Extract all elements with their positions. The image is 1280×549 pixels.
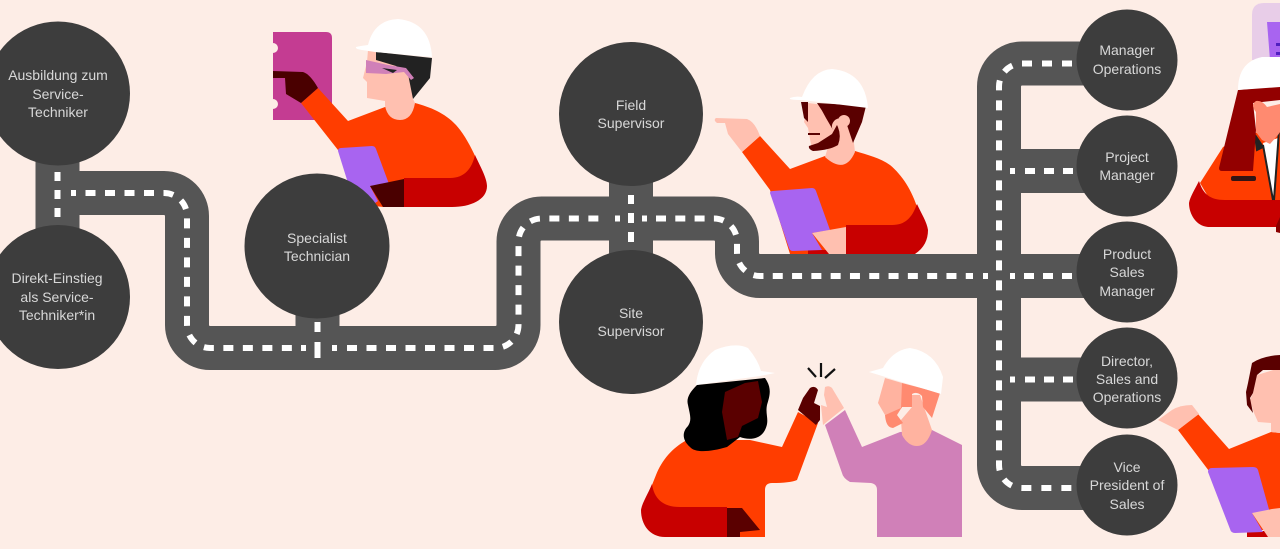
lower hand xyxy=(1252,508,1280,537)
raised dark hand xyxy=(798,387,820,425)
node: Specialist Technician xyxy=(244,174,390,318)
figure: technician pointing at tablet xyxy=(273,19,487,215)
eye xyxy=(382,68,397,73)
icon: tablet under arm xyxy=(338,146,389,215)
node: Director, Sales and Operations: Operations xyxy=(1093,389,1161,405)
node: Director, Sales and Operations: Director, xyxy=(1101,353,1153,369)
purple tablet xyxy=(1267,22,1280,60)
red strip xyxy=(808,250,830,254)
clap spark xyxy=(808,363,835,378)
node: Direkt-Einstieg: Techniker*in xyxy=(19,307,95,323)
hair xyxy=(801,102,866,143)
neck and face xyxy=(363,50,415,120)
hair xyxy=(376,52,432,99)
shirt xyxy=(301,88,476,207)
node: Direkt-Einstieg xyxy=(0,225,130,369)
node: Project Manager: Project xyxy=(1105,149,1149,165)
node: Site Supervisor: Site xyxy=(619,305,643,321)
ear xyxy=(838,115,850,127)
figure: field supervisor pointing xyxy=(715,69,928,254)
node: Vice President of Sales: Sales xyxy=(1109,496,1145,512)
node: Ausbildung zum Service-Techniker xyxy=(0,22,130,166)
lilac panel xyxy=(1252,3,1280,60)
face xyxy=(1250,368,1280,433)
face and neck xyxy=(804,103,855,165)
node: Ausbildung zum Service-Techniker: Service- xyxy=(32,86,84,102)
node: Manager Operations: Manager xyxy=(1099,42,1155,58)
shirt xyxy=(1178,414,1280,530)
beard xyxy=(809,125,840,151)
pointing hand xyxy=(715,118,760,152)
sleeve xyxy=(404,155,487,207)
node: Specialist Technician: Specialist xyxy=(287,230,347,246)
node: Ausbildung zum Service-Techniker: Techniker xyxy=(28,104,88,120)
shirt xyxy=(742,136,920,254)
pen xyxy=(1276,217,1280,233)
node: Ausbildung zum Service-Techniker: Ausbildung zum xyxy=(8,67,108,83)
node: Field Supervisor xyxy=(559,42,703,186)
face xyxy=(1253,101,1280,144)
orange jacket xyxy=(1200,125,1280,205)
clipboard xyxy=(770,188,830,251)
node: Direkt-Einstieg: Direkt-Einstieg xyxy=(11,270,103,286)
node: Product Sales Manager: Manager xyxy=(1099,283,1155,299)
hair xyxy=(1219,86,1280,171)
node: Field Supervisor: Supervisor xyxy=(598,115,665,131)
helmet xyxy=(790,69,868,108)
raised hand xyxy=(1158,405,1199,430)
pointing hand xyxy=(273,71,318,103)
safety glasses xyxy=(366,60,414,80)
white shirt xyxy=(1263,138,1278,200)
node: Project Manager: Manager xyxy=(1099,167,1155,183)
node: Direkt-Einstieg: als Service- xyxy=(20,289,94,305)
hair and beard xyxy=(885,383,940,428)
hair xyxy=(684,378,770,451)
helmet xyxy=(356,19,432,57)
pink shirt xyxy=(825,410,962,537)
dark face xyxy=(722,381,762,440)
neck xyxy=(901,395,932,446)
sleeve xyxy=(846,204,928,254)
left helmet xyxy=(696,345,775,385)
figure: manager at top right xyxy=(1189,3,1280,233)
lower dark hand xyxy=(727,508,760,537)
hair xyxy=(1246,355,1280,413)
node: Product Sales Manager xyxy=(1076,222,1178,322)
node: Field Supervisor: Field xyxy=(616,97,646,113)
node: Vice President of Sales xyxy=(1076,434,1178,536)
node: Manager Operations: Operations xyxy=(1093,61,1161,77)
node: Site Supervisor: Supervisor xyxy=(598,323,665,339)
figure: person at bottom right xyxy=(1158,355,1280,537)
red bottom xyxy=(1247,531,1269,537)
collar xyxy=(1255,128,1279,200)
node: Vice President of Sales: Vice xyxy=(1114,459,1141,475)
right helmet xyxy=(869,348,943,394)
road network xyxy=(58,64,1110,488)
red hem xyxy=(1189,181,1280,227)
lower hand xyxy=(812,227,846,254)
node: Product Sales Manager: Product xyxy=(1103,246,1151,262)
lower hand xyxy=(370,179,404,207)
red sleeve xyxy=(641,484,727,537)
tablet xyxy=(1208,467,1270,533)
orange shirt xyxy=(650,412,818,537)
mouth xyxy=(808,133,820,135)
node: Product Sales Manager: Sales xyxy=(1109,264,1145,280)
pocket xyxy=(1231,176,1256,181)
road markings xyxy=(58,64,1073,488)
tablet dots xyxy=(1276,43,1280,55)
node: Vice President of Sales: President of xyxy=(1090,477,1164,493)
raised skin hand xyxy=(821,386,844,425)
node: Director, Sales and Operations xyxy=(1076,328,1178,428)
node: Specialist Technician: Technician xyxy=(284,248,350,264)
node: Director, Sales and Operations: Sales and xyxy=(1096,371,1158,387)
node: Manager Operations xyxy=(1076,10,1178,110)
figure: high five xyxy=(641,345,962,537)
face xyxy=(878,378,902,415)
node: Site Supervisor xyxy=(559,250,703,394)
helmet xyxy=(1238,57,1280,90)
node: Project Manager xyxy=(1076,116,1178,216)
